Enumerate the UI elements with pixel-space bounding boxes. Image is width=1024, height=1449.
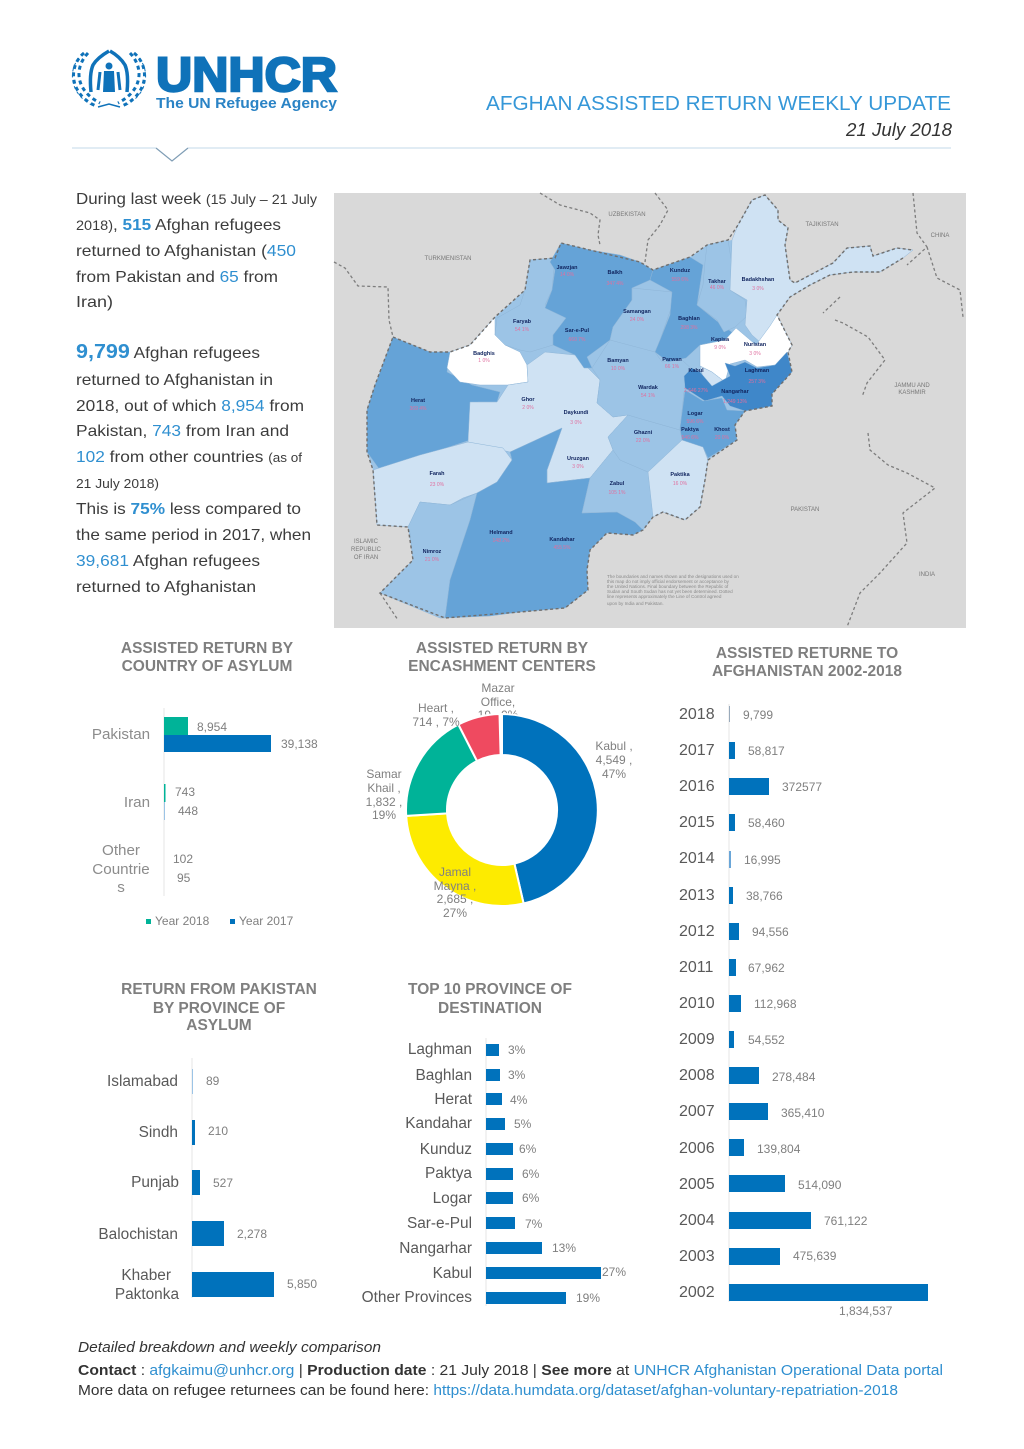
province: Logar, Paktya, Khost bbox=[680, 390, 745, 458]
province fills bbox=[367, 195, 913, 618]
footer notes: More data on refugee returnees can be found here: https://data.humdata.org/dataset/afghan-voluntary-repatriation-2018 bbox=[78, 1383, 898, 1399]
footer notes: Detailed breakdown and weekly comparison bbox=[78, 1340, 381, 1356]
province labels: 455 5% bbox=[554, 545, 571, 551]
category labels: Sindh bbox=[139, 1124, 178, 1141]
province: Bamyan, Wardak bbox=[592, 340, 695, 430]
province: Samangan bbox=[610, 288, 674, 352]
province labels: Kandahar bbox=[549, 537, 576, 543]
bars: Iran bbox=[124, 784, 198, 820]
bar values: 13% bbox=[552, 1241, 576, 1255]
text block: year to date summary: 9,799 Afghan refugees bbox=[76, 341, 260, 363]
year labels: 2007 bbox=[679, 1103, 715, 1120]
province labels: Uruzgan bbox=[567, 456, 590, 462]
category labels: Khaber bbox=[121, 1267, 171, 1284]
bar values: 365,410 bbox=[781, 1106, 825, 1120]
province labels: 2,646 27% bbox=[684, 388, 709, 394]
text block: year to date summary: Pakistan, 743 from Iran and bbox=[76, 423, 289, 440]
province labels: Baghlan bbox=[678, 316, 700, 322]
bars: Other Countries: 95 bbox=[177, 871, 191, 885]
category labels: Sar-e-Pul bbox=[407, 1215, 472, 1232]
province: Jawzjan, Balkh, Sar-e-Pul bbox=[545, 243, 653, 368]
province labels: 660 7% bbox=[569, 337, 586, 343]
bar values: 27% bbox=[602, 1265, 626, 1279]
bars bbox=[729, 706, 928, 1301]
province: Badakhshan bbox=[730, 195, 913, 342]
province labels: Badakhshan bbox=[742, 277, 775, 283]
footer notes bbox=[78, 1340, 943, 1399]
category labels: Balochistan bbox=[98, 1226, 178, 1243]
chart: assisted return by encashment centers bbox=[366, 640, 633, 920]
map disclaimer: Sudan and South Sudan has not yet been determined. Dotted bbox=[607, 589, 733, 594]
province: Faryab bbox=[495, 258, 566, 352]
heading: COUNTRY OF ASYLUM bbox=[122, 658, 292, 675]
year labels: 2004 bbox=[679, 1212, 715, 1229]
province labels: 3 0% bbox=[749, 351, 761, 357]
donut labels: 2,685 , bbox=[437, 892, 473, 906]
wordmark: UNHCR bbox=[156, 49, 337, 102]
year labels: 2013 bbox=[679, 887, 715, 904]
bar values bbox=[508, 1043, 626, 1305]
map disclaimer bbox=[607, 574, 739, 606]
map disclaimer: line represents approximately the Line of Control agreed bbox=[607, 594, 722, 599]
bar values: 16,995 bbox=[744, 853, 781, 867]
donut labels: Kabul , bbox=[595, 739, 633, 753]
bar values: 6% bbox=[519, 1142, 537, 1156]
bar values: 6% bbox=[522, 1191, 540, 1205]
text block: last week summary: returned to Afghanistan ( 450 bbox=[76, 243, 296, 260]
province labels: Nangarhar bbox=[721, 389, 750, 395]
province labels: 20 0% bbox=[715, 435, 730, 441]
legend: Year 2017 bbox=[239, 914, 294, 928]
heading: ENCASHMENT CENTERS bbox=[408, 658, 596, 675]
bars: Pakistan: Pakistan bbox=[92, 726, 150, 743]
bar values: 3% bbox=[508, 1068, 526, 1082]
bar values: 9,799 bbox=[743, 708, 773, 722]
bars: Other Countries bbox=[92, 842, 193, 896]
text block: last week summary: from Pakistan and 65 from bbox=[76, 269, 278, 286]
neighbouring country labels: JAMMU AND bbox=[894, 383, 930, 389]
text block: last week summary: Iran) bbox=[76, 294, 113, 311]
text block: year to date summary: returned to Afghanistan in bbox=[76, 372, 273, 389]
donut labels: Mazar bbox=[481, 681, 515, 695]
bar values: 475,639 bbox=[793, 1249, 837, 1263]
bars: Other Countries: 102 bbox=[173, 852, 193, 866]
province labels: Paktya bbox=[681, 427, 700, 433]
neighbouring country labels: TAJIKISTAN bbox=[805, 222, 839, 228]
text block: year to date summary bbox=[76, 341, 311, 596]
province labels: Zabul bbox=[610, 481, 625, 487]
neighbouring country labels: UZBEKISTAN bbox=[608, 212, 646, 218]
province: Badghis bbox=[447, 317, 528, 385]
donut labels: 4,549 , bbox=[596, 753, 632, 767]
text block: year to date summary: 21 July 2018) bbox=[76, 477, 159, 491]
year labels: 2011 bbox=[679, 959, 714, 976]
chart: assisted returnee to Afghanistan 2002-2018 bbox=[679, 645, 928, 1318]
year labels: 2016 bbox=[679, 778, 715, 795]
bar values: 89 bbox=[206, 1074, 220, 1088]
tagline: The UN Refugee Agency bbox=[156, 95, 338, 112]
province labels bbox=[410, 265, 775, 563]
donut labels: 714 , 7% bbox=[412, 715, 460, 729]
province: Helmand and Kandahar bbox=[445, 428, 643, 618]
logo: UNHCR bbox=[72, 49, 338, 112]
category labels: Kunduz bbox=[420, 1141, 472, 1158]
province labels: Kapisa bbox=[711, 337, 730, 343]
bars: Pakistan bbox=[92, 717, 318, 752]
neighbouring country labels: PAKISTAN bbox=[791, 507, 819, 513]
province: Takhar bbox=[697, 240, 747, 332]
province labels: Bamyan bbox=[607, 358, 629, 364]
category labels: Baghlan bbox=[416, 1067, 472, 1084]
province labels: Nimroz bbox=[423, 549, 442, 555]
bars: Iran: 743 bbox=[175, 785, 195, 799]
date: 21 July 2018 bbox=[845, 120, 952, 140]
label hidden behind donut: Mazar Office: 19 , 0% bbox=[478, 708, 519, 722]
province: Ghazni bbox=[608, 415, 682, 472]
bar values: 3% bbox=[508, 1043, 526, 1057]
bar values: 1,834,537 bbox=[839, 1304, 893, 1318]
bars bbox=[486, 1044, 601, 1304]
province: Farah bbox=[373, 442, 512, 527]
province labels: Takhar bbox=[708, 279, 727, 285]
bar values: 2,278 bbox=[237, 1227, 267, 1241]
bars: Iran: 448 bbox=[178, 804, 198, 818]
province labels: Helmand bbox=[489, 530, 513, 536]
province: Paktika bbox=[648, 440, 708, 520]
province labels: 559 6% bbox=[672, 277, 689, 283]
category labels: Paktya bbox=[425, 1165, 472, 1182]
province labels: 546 6% bbox=[682, 435, 699, 441]
year labels: 2002 bbox=[679, 1284, 715, 1301]
category labels: Kabul bbox=[433, 1265, 472, 1282]
category labels: Herat bbox=[434, 1091, 473, 1108]
province labels: 9 0% bbox=[714, 345, 726, 351]
province labels: 46 0% bbox=[710, 285, 725, 291]
bar values: 94,556 bbox=[752, 925, 789, 939]
heading: ASSISTED RETURN BY bbox=[121, 640, 294, 657]
year labels: 2010 bbox=[679, 995, 715, 1012]
province: Ghor, Daykundi, Uruzgan bbox=[468, 352, 628, 483]
year labels: 2014 bbox=[679, 850, 715, 867]
province labels: Kabul bbox=[688, 368, 704, 374]
category labels: Other Provinces bbox=[362, 1289, 472, 1306]
neighbouring country labels: OF IRAN bbox=[354, 555, 378, 561]
bar values: 67,962 bbox=[748, 961, 785, 975]
bar values: 58,817 bbox=[748, 744, 785, 758]
province labels: 105 1% bbox=[609, 490, 626, 496]
neighbouring country labels bbox=[351, 212, 949, 578]
year labels: 2015 bbox=[679, 814, 715, 831]
province labels: Ghor bbox=[521, 397, 535, 403]
province: Parwan bbox=[700, 366, 725, 392]
map disclaimer: The boundaries and names shown and the designations used on bbox=[607, 574, 739, 579]
year labels: 2018 bbox=[679, 706, 715, 723]
province labels: Balkh bbox=[608, 270, 623, 276]
text block: last week summary bbox=[76, 191, 317, 311]
map background bbox=[334, 193, 966, 628]
chart: return from Pakistan by province of asylum bbox=[98, 981, 317, 1303]
province labels: 24 0% bbox=[630, 317, 645, 323]
category labels: Logar bbox=[433, 1190, 472, 1207]
donut labels: Office, bbox=[481, 695, 515, 709]
neighbouring country labels: REPUBLIC bbox=[351, 547, 382, 553]
province labels: Samangan bbox=[623, 309, 652, 315]
bar values: 38,766 bbox=[746, 889, 783, 903]
heading: ASSISTED RETURNE TO bbox=[716, 645, 898, 662]
province labels: Badghis bbox=[473, 351, 495, 357]
neighbouring country labels: KASHMIR bbox=[898, 390, 926, 396]
province labels: 1 0% bbox=[478, 358, 490, 364]
province: Kunar, Laghman, Kabul, Nangarhar bbox=[684, 352, 792, 411]
bars: Iran: Iran bbox=[124, 794, 150, 811]
province labels: Jawzjan bbox=[556, 265, 578, 271]
province labels: 2 0% bbox=[522, 405, 534, 411]
province labels: 3 0% bbox=[572, 464, 584, 470]
year labels: 2008 bbox=[679, 1067, 715, 1084]
legend bbox=[146, 914, 294, 928]
province labels: 3 0% bbox=[570, 420, 582, 426]
donut labels: 47% bbox=[602, 767, 626, 781]
bar values bbox=[206, 1074, 317, 1291]
bars: Other Countries: s bbox=[117, 879, 125, 896]
bar values: 112,968 bbox=[754, 997, 797, 1011]
category labels: Nangarhar bbox=[399, 1240, 472, 1257]
footer notes: Contact : afgkaimu@unhcr.org | Production date : 21 July 2018 | See more at UNHCR Afghanistan Operational Data portal bbox=[78, 1363, 943, 1379]
donut labels: 19% bbox=[372, 808, 396, 822]
donut labels: 27% bbox=[443, 906, 467, 920]
year labels: 2006 bbox=[679, 1140, 715, 1157]
neighbouring country labels: TURKMENISTAN bbox=[425, 256, 471, 262]
province labels: Nuristan bbox=[744, 342, 767, 348]
bars: Pakistan: 8,954 bbox=[197, 720, 227, 734]
heading bbox=[408, 640, 596, 675]
donut labels: Samar bbox=[366, 767, 402, 781]
province: Nimroz bbox=[380, 493, 477, 618]
province labels: Logar bbox=[687, 411, 703, 417]
province labels: Herat bbox=[411, 398, 425, 404]
province labels: Faryab bbox=[513, 319, 532, 325]
bar values: 5,850 bbox=[287, 1277, 317, 1291]
bars bbox=[192, 1069, 274, 1297]
bar values: 139,804 bbox=[757, 1142, 801, 1156]
text block: year to date summary: 2018, out of which 8,954 from bbox=[76, 398, 304, 415]
province: Zabul bbox=[582, 450, 657, 530]
province labels: 1,249 13% bbox=[723, 399, 748, 405]
heading bbox=[121, 981, 317, 1034]
province labels: 10 0% bbox=[611, 366, 626, 372]
heading bbox=[121, 640, 294, 675]
province labels: 3 0% bbox=[752, 286, 764, 292]
province labels: 347 4% bbox=[607, 281, 624, 287]
province labels: 14 0% bbox=[560, 272, 575, 278]
donut chart bbox=[406, 714, 598, 906]
text block: last week summary: 2018), 515 Afghan refugees bbox=[76, 217, 281, 234]
category labels: Paktonka bbox=[115, 1286, 179, 1303]
bar values: 58,460 bbox=[748, 816, 785, 830]
province labels: 23 0% bbox=[430, 482, 445, 488]
bar values: 372577 bbox=[782, 780, 822, 794]
category labels: Kandahar bbox=[405, 1115, 472, 1132]
donut labels: Khail , bbox=[367, 781, 401, 795]
map of Afghanistan by province bbox=[334, 193, 966, 628]
bar values: 514,090 bbox=[798, 1178, 842, 1192]
bar values: 5% bbox=[514, 1117, 532, 1131]
donut labels: Mayna , bbox=[434, 879, 476, 893]
province labels: 16 0% bbox=[673, 481, 688, 487]
province: Kunduz and Baghlan bbox=[650, 257, 733, 362]
chart: assisted return by country of asylum bbox=[92, 640, 318, 928]
province labels: 257 3% bbox=[749, 379, 766, 385]
category labels bbox=[98, 1073, 179, 1303]
heading: ASSISTED RETURN BY bbox=[416, 640, 589, 657]
bar values: 4% bbox=[510, 1093, 528, 1107]
year labels: 2003 bbox=[679, 1248, 715, 1265]
heading: TOP 10 PROVINCE OF bbox=[408, 981, 572, 998]
province labels: 54 1% bbox=[515, 327, 530, 333]
donut labels: Jamal bbox=[439, 865, 471, 879]
province labels: 66 1% bbox=[665, 364, 680, 370]
province: Herat bbox=[367, 337, 500, 470]
text block: last week summary: During last week (15 July – 21 July bbox=[76, 191, 317, 208]
donut labels: 1,832 , bbox=[366, 795, 402, 809]
category labels: Laghman bbox=[408, 1041, 472, 1058]
icon: laurel wreath and sheltering hands bbox=[72, 51, 146, 107]
province labels: 369 4% bbox=[410, 406, 427, 412]
bar values: 527 bbox=[213, 1176, 233, 1190]
country outline bbox=[367, 195, 913, 618]
neighbouring country borders bbox=[334, 193, 963, 627]
province labels: 596 6% bbox=[687, 419, 704, 425]
text block: year to date summary: 102 from other countries (as of bbox=[76, 449, 303, 466]
province labels: 22 0% bbox=[636, 438, 651, 444]
bar values: 210 bbox=[208, 1124, 228, 1138]
bars: Other Countries: Other bbox=[102, 842, 140, 859]
province labels: Sar-e-Pul bbox=[565, 328, 590, 334]
province labels: 54 1% bbox=[641, 393, 656, 399]
header rule with chevron bbox=[72, 148, 951, 161]
province labels: 21 0% bbox=[425, 557, 440, 563]
neighbouring country labels: ISLAMIC bbox=[354, 539, 379, 545]
map disclaimer: the United Nations. Final boundary between the Republic of bbox=[607, 584, 729, 589]
text block: year to date summary: the same period in 2017, when bbox=[76, 527, 311, 544]
title: AFGHAN ASSISTED RETURN WEEKLY UPDATE bbox=[486, 93, 951, 115]
heading: ASYLUM bbox=[186, 1017, 252, 1034]
province labels: Parwan bbox=[662, 357, 682, 363]
bar values: 6% bbox=[522, 1167, 540, 1181]
bar values: 7% bbox=[525, 1217, 543, 1231]
heading: AFGHANISTAN 2002-2018 bbox=[712, 663, 902, 680]
year labels: 2012 bbox=[679, 923, 715, 940]
province labels: Paktika bbox=[670, 472, 691, 478]
province labels: 148 2% bbox=[493, 538, 510, 544]
legend: Year 2018 bbox=[155, 914, 210, 928]
province labels: Wardak bbox=[638, 385, 659, 391]
base fill of country bbox=[367, 240, 792, 618]
chart: top 10 province of destination bbox=[362, 981, 626, 1306]
bar values: 761,122 bbox=[824, 1214, 868, 1228]
year labels: 2017 bbox=[679, 742, 715, 759]
province labels: Daykundi bbox=[564, 410, 589, 416]
bar values bbox=[743, 708, 893, 1318]
bars: Pakistan: 39,138 bbox=[281, 737, 318, 751]
text block: year to date summary: returned to Afghanistan bbox=[76, 579, 256, 596]
map disclaimer: upon by India and Pakistan. bbox=[607, 601, 664, 606]
bar values: 19% bbox=[576, 1291, 600, 1305]
province: Nuristan, Kapisa bbox=[700, 315, 792, 382]
category labels bbox=[362, 1041, 473, 1306]
neighbouring country labels: CHINA bbox=[931, 233, 949, 239]
category labels: Islamabad bbox=[107, 1073, 178, 1090]
bar values: 278,484 bbox=[772, 1070, 816, 1084]
heading: RETURN FROM PAKISTAN bbox=[121, 981, 317, 998]
province labels: Khost bbox=[714, 427, 730, 433]
donut labels: Heart , bbox=[418, 701, 454, 715]
heading bbox=[712, 645, 902, 680]
year labels: 2009 bbox=[679, 1031, 715, 1048]
bar values: 54,552 bbox=[748, 1033, 785, 1047]
province labels: Farah bbox=[430, 471, 445, 477]
province labels: Kunduz bbox=[670, 268, 690, 274]
year labels bbox=[679, 706, 715, 1301]
map disclaimer: this map do not imply official endorsement or acceptance by bbox=[607, 579, 730, 584]
donut labels bbox=[366, 681, 633, 920]
bars: Other Countries: Countrie bbox=[92, 861, 150, 878]
neighbouring country labels: INDIA bbox=[919, 572, 935, 578]
text block: year to date summary: This is 75% less compared to bbox=[76, 501, 301, 518]
heading: DESTINATION bbox=[438, 1000, 542, 1017]
heading bbox=[408, 981, 572, 1017]
province labels: Laghman bbox=[745, 368, 770, 374]
heading: BY PROVINCE OF bbox=[153, 1000, 285, 1017]
province labels: Ghazni bbox=[634, 430, 653, 436]
category labels: Punjab bbox=[131, 1174, 179, 1191]
year labels: 2005 bbox=[679, 1176, 715, 1193]
text block: year to date summary: 39,681 Afghan refugees bbox=[76, 553, 260, 570]
province labels: 298 3% bbox=[681, 325, 698, 331]
